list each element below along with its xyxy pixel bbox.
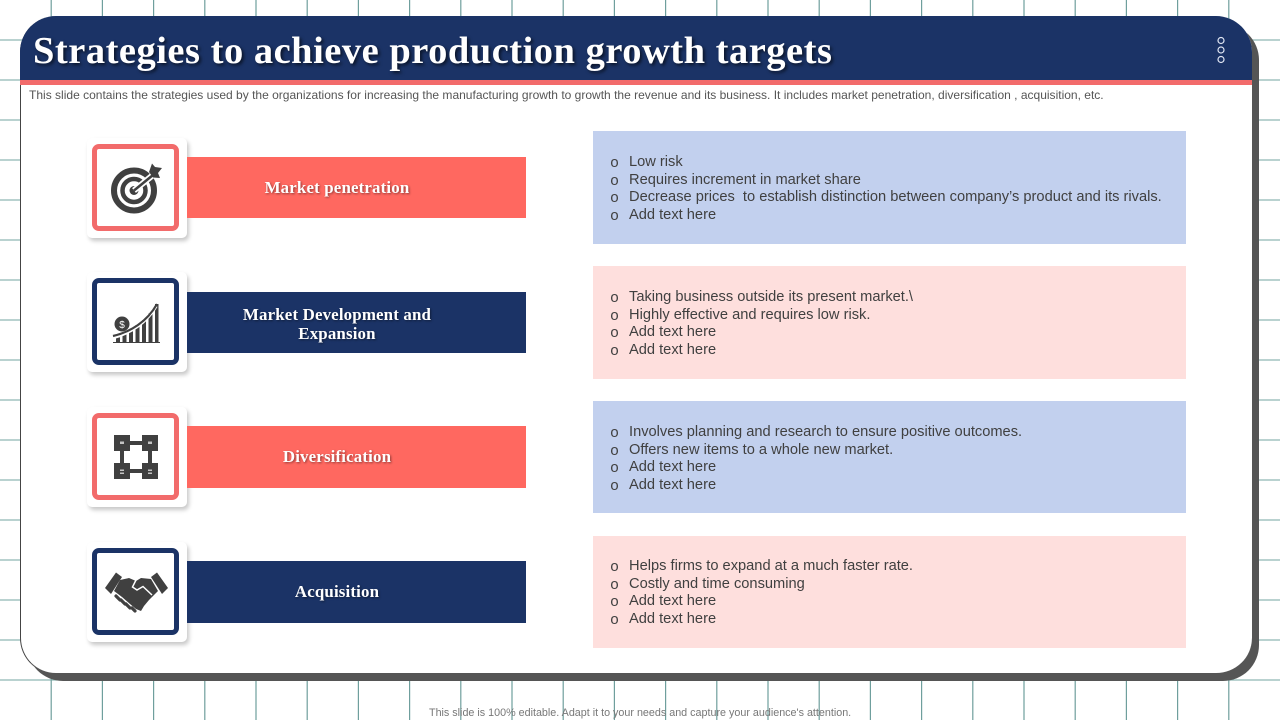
panel: market development details: Taking business outside its present market.\ — [629, 289, 913, 305]
panel: diversification details: o — [610, 443, 619, 460]
label bar: market development: Market Development and — [243, 304, 431, 324]
icon tile: handshake — [87, 542, 187, 642]
panel: acquisition details: o — [610, 559, 619, 576]
panel: acquisition details: Costly and time consuming — [629, 576, 805, 592]
panel: market penetration details: Decrease prices to establish distinction between company’s product and its rivals. — [629, 189, 1162, 205]
panel: market penetration details — [593, 131, 1186, 244]
panel: acquisition details: Add text here — [629, 593, 716, 609]
icon: menu dots — [1217, 36, 1225, 64]
icon tile: diversification nodes — [87, 407, 187, 507]
panel: acquisition details: Helps firms to expand at a much faster rate. — [629, 558, 913, 574]
panel: diversification details: Add text here — [629, 459, 716, 475]
panel: market development details — [593, 266, 1186, 379]
panel: acquisition details: o — [610, 577, 619, 594]
panel: acquisition details: Add text here — [629, 611, 716, 627]
header band — [20, 16, 1252, 80]
label bar: diversification: Diversification — [283, 447, 391, 466]
panel: diversification details: Add text here — [629, 477, 716, 493]
panel: diversification details: o — [610, 425, 619, 442]
panel: acquisition details — [593, 536, 1186, 648]
label bar: market penetration — [187, 157, 526, 218]
label bar: market penetration: Market penetration — [265, 178, 409, 197]
panel: acquisition details: o — [610, 612, 619, 629]
panel: market penetration details: o — [610, 190, 619, 207]
label bar: market development — [187, 292, 526, 353]
panel: diversification details: Involves planning and research to ensure positive outcomes. — [629, 424, 1022, 440]
panel: diversification details — [593, 401, 1186, 513]
label bar: acquisition: Acquisition — [295, 582, 379, 601]
footer note: This slide is 100% editable. Adapt it to your needs and capture your audience's attention. — [429, 707, 851, 719]
icon tile: growth chart — [87, 272, 187, 372]
panel: market penetration details: Low risk — [629, 154, 683, 170]
panel: market development details: o — [610, 343, 619, 360]
panel: market development details: o — [610, 325, 619, 342]
icon tile: growth chart: $ — [119, 320, 125, 331]
panel: acquisition details: o — [610, 594, 619, 611]
panel: market penetration details: o — [610, 155, 619, 172]
panel: market development details: o — [610, 308, 619, 325]
header accent line — [20, 80, 1252, 85]
panel: market penetration details: Requires increment in market share — [629, 172, 861, 188]
panel: diversification details: o — [610, 478, 619, 495]
panel: market development details: Highly effective and requires low risk. — [629, 307, 870, 323]
label bar: diversification — [187, 426, 526, 488]
panel: diversification details: o — [610, 460, 619, 477]
label bar: market development: Expansion — [298, 324, 376, 342]
panel: market penetration details: o — [610, 208, 619, 225]
panel: market development details: Add text here — [629, 324, 716, 340]
subtitle description: This slide contains the strategies used by the organizations for increasing the manufacturing growth to growth the revenue and its business. It includes market penetration, diversification , acquisition, etc. — [29, 88, 1104, 102]
panel: market penetration details: o — [610, 173, 619, 190]
title: Strategies to achieve production growth targets — [33, 30, 832, 72]
panel: market development details: o — [610, 290, 619, 307]
panel: diversification details: Offers new items to a whole new market. — [629, 442, 893, 458]
panel: market development details: Add text here — [629, 342, 716, 358]
panel: market penetration details: Add text here — [629, 207, 716, 223]
icon tile: target — [87, 138, 187, 238]
label bar: acquisition — [187, 561, 526, 623]
